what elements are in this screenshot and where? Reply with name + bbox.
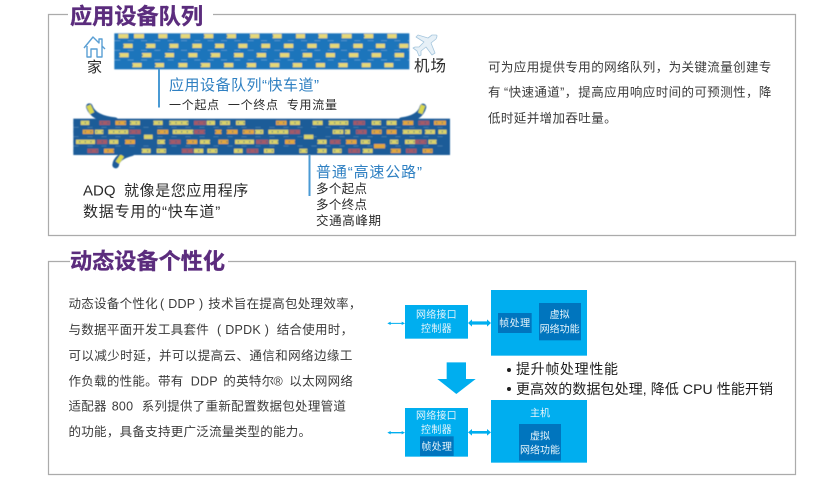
bullet list: benefits: 提升帧处理性能 [516,361,618,377]
caption: ADQ express lane: 数据专用的“快车道” [83,204,221,220]
before: host [491,290,587,356]
diagram: packet processing before and after [387,290,587,463]
label: home: 家 [87,59,102,76]
text block: DDP description: 以太网网络 [289,374,353,388]
callout: regular highway [310,155,422,228]
before: network interface controller: 控制器 [421,322,452,335]
text block: DDP description: 动态设备个性化 [68,296,158,311]
express lane road [114,33,409,69]
text block: DDP description: 系列提供了重新配置数据包处理管道 [142,398,346,414]
before: host: 网络功能 [540,322,580,335]
callout: express lane [159,69,337,112]
panel: dynamic device personalization [48,249,796,474]
bullet list: benefits [507,361,773,397]
icon: home [84,37,105,57]
after: host: 网络功能 [520,443,560,456]
text block: DDP description: 可以减少时延，并可以提高云、通信和网络边缘工 [68,348,353,363]
label: airport: 机场 [414,57,446,75]
callout: regular highway: 多个终点 [316,197,367,212]
after: network interface controller: 网络接口 [416,409,457,422]
after: host: 虚拟 [530,429,550,442]
arrow: before controller to host [468,319,491,327]
text block: queue description: 可为应用提供专用的网络队列，为关键流量创建专 [488,60,772,74]
text block: queue description: 低时延并增加吞吐量。 [488,110,617,126]
after: network interface controller [405,408,468,457]
callout: express lane: 应用设备队列“快车道” [169,76,319,94]
text block: DDP description: 与数据平面开发工具套件 [68,322,209,337]
illustration: express lane and highway [73,33,450,228]
icon: airplane [413,35,437,56]
before: host: 虚拟 [550,308,570,321]
after: host: 主机 [530,406,550,419]
before: host: 帧处理 [499,317,530,330]
callout: regular highway: 交通高峰期 [316,213,381,228]
arrow: before external link [387,322,405,325]
text block: DDP description: ( DDP ) [160,297,203,311]
caption: ADQ express lane [83,182,249,220]
heading: dynamic device personalization: 动态设备个性化 [70,249,225,274]
caption: ADQ express lane: 就像是您应用程序 [124,182,249,200]
before: network interface controller: 网络接口 [416,308,457,321]
bullet list: benefits: 更高效的数据包处理, 降低 CPU 性能开销 [516,381,773,397]
text block: DDP description: ( DPDK ) [217,323,269,337]
text block: DDP description: 技术旨在提高包处理效率， [208,296,362,311]
text block: queue description: 有 [488,86,501,100]
before: network interface controller [405,305,468,339]
callout: regular highway: 多个起点 [316,182,367,196]
highway road [73,104,450,165]
after: host [491,400,587,463]
text block: queue description: “快速通道”， [504,86,578,100]
text block: DDP description: 作负载的性能。带有 [68,374,184,388]
text block: DDP description: 适配器 [68,400,107,414]
text block: DDP description [68,296,362,439]
callout: regular highway: 普通“高速公路” [316,164,422,181]
arrow: after external link [387,431,405,434]
arrow: after controller to host [468,429,491,436]
arrow: down transition [437,362,476,394]
panel: application device queues [48,4,796,236]
caption: ADQ express lane: ADQ [83,182,116,200]
callout: express lane: 一个起点 一个终点 专用流量 [169,97,337,112]
text block: queue description: 提高应用响应时间的可预测性，降 [578,84,772,100]
heading: application device queues: 应用设备队列 [70,4,203,29]
text block: DDP description: 的英特尔 [223,374,274,388]
text block: DDP description: 结合使用时， [277,322,353,337]
text block: queue description [488,60,772,126]
after: network interface controller: 帧处理 [421,440,452,453]
text block: DDP description: DDP [191,374,218,388]
after: network interface controller: 控制器 [421,423,452,436]
text block: DDP description: 800 [112,400,133,414]
text block: DDP description: 的功能，具备支持更广泛流量类型的能力。 [68,424,311,439]
text block: DDP description: ® [274,374,284,388]
